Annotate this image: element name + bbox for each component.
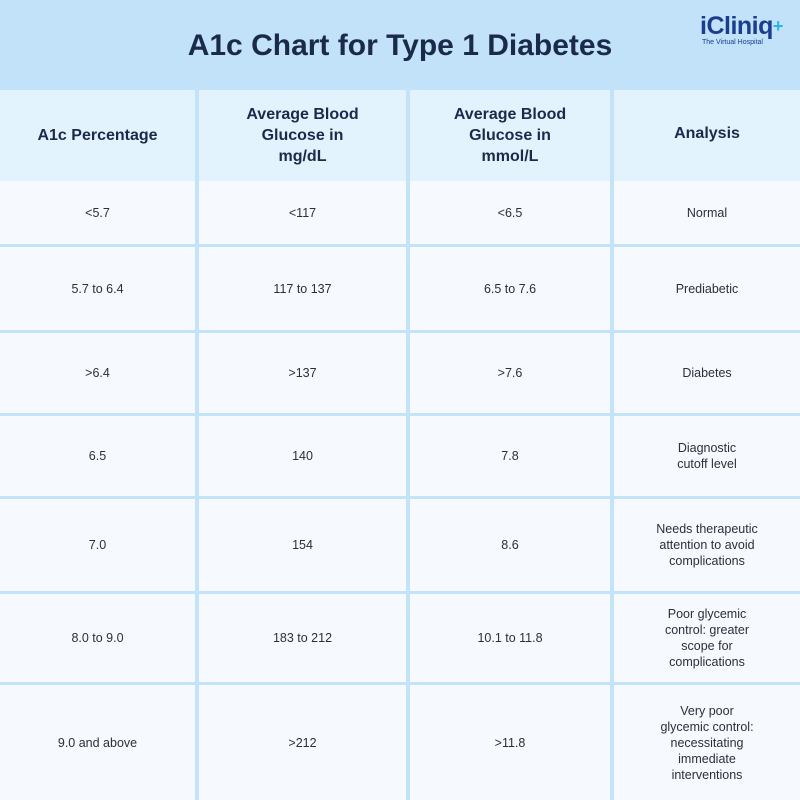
table: complications — [669, 655, 745, 669]
table: Average Blood — [454, 106, 566, 123]
table: 8.0 to 9.0 — [71, 631, 124, 645]
table: 6.5 — [89, 449, 106, 463]
table: 154 — [292, 538, 313, 552]
table: Diagnostic — [678, 441, 736, 455]
table: Analysis — [674, 125, 740, 142]
table: necessitating — [671, 736, 743, 750]
row 7 — [0, 685, 800, 800]
table: A1c Percentage — [37, 127, 158, 144]
table: 10.1 to 11.8 — [477, 631, 543, 645]
table: Very poor — [680, 704, 734, 718]
table: 117 to 137 — [273, 282, 332, 296]
table: Glucose in — [469, 127, 551, 144]
logo: iCliniq+ — [700, 12, 783, 40]
table: >7.6 — [498, 366, 522, 380]
table: 140 — [292, 449, 313, 463]
table: cutoff level — [677, 457, 737, 471]
table: <5.7 — [85, 206, 110, 220]
table: attention to avoid — [659, 538, 755, 552]
table: >212 — [288, 736, 317, 750]
table: Glucose in — [262, 127, 343, 144]
table: 8.6 — [501, 538, 519, 552]
table: interventions — [672, 768, 742, 782]
row 1 — [0, 181, 800, 244]
table: Average Blood — [246, 106, 359, 123]
table: <6.5 — [498, 206, 522, 220]
row 5 — [0, 499, 800, 591]
title: A1c Chart for Type 1 Diabetes — [188, 29, 612, 62]
table: Diabetes — [682, 366, 732, 380]
table: 7.8 — [501, 449, 519, 463]
table: Normal — [687, 206, 727, 220]
table: control: greater — [665, 623, 749, 637]
title bar — [0, 0, 800, 88]
table: Poor glycemic — [668, 607, 746, 621]
table: glycemic control: — [660, 720, 754, 734]
row 6 — [0, 594, 800, 682]
table: Needs therapeutic — [656, 522, 758, 536]
table: 6.5 to 7.6 — [484, 282, 536, 296]
table: mmol/L — [482, 148, 538, 165]
table: 183 to 212 — [273, 631, 332, 645]
table: 7.0 — [89, 538, 106, 552]
table: >137 — [288, 366, 317, 380]
table: <117 — [289, 206, 316, 220]
table: complications — [669, 554, 745, 568]
table: 9.0 and above — [58, 736, 137, 750]
table: immediate — [678, 752, 736, 766]
table: Prediabetic — [676, 282, 738, 296]
header row — [0, 90, 800, 181]
row 3 — [0, 333, 800, 413]
table: mg/dL — [278, 148, 326, 165]
table: >11.8 — [495, 736, 525, 750]
logo: The Virtual Hospital — [702, 39, 763, 46]
row 4 — [0, 416, 800, 496]
row 2 — [0, 247, 800, 330]
table: >6.4 — [85, 366, 110, 380]
table: scope for — [681, 639, 733, 653]
table: 5.7 to 6.4 — [71, 282, 124, 296]
